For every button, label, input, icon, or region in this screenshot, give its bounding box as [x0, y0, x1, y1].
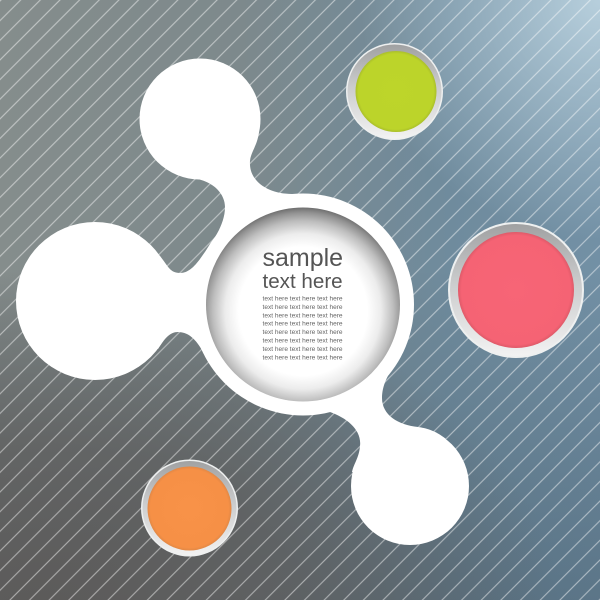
heading: sample: sample	[262, 244, 343, 272]
body text lines: text here text here text here	[262, 296, 343, 302]
body text lines: text here text here text here	[262, 338, 343, 344]
center circle well	[206, 208, 400, 402]
center text block	[262, 244, 343, 361]
white connected blob shape	[16, 58, 469, 545]
body text lines: text here text here text here	[262, 354, 343, 361]
body text lines: text here text here text here	[262, 304, 343, 311]
body text lines: text here text here text here	[262, 329, 343, 336]
red circle	[448, 222, 584, 358]
heading: text here: text here	[262, 270, 343, 293]
body text lines: text here text here text here	[262, 321, 343, 328]
body text lines	[262, 296, 343, 361]
orange circle	[141, 460, 238, 556]
body text lines: text here text here text here	[262, 346, 343, 353]
body text lines: text here text here text here	[262, 312, 343, 319]
green circle	[346, 43, 443, 140]
